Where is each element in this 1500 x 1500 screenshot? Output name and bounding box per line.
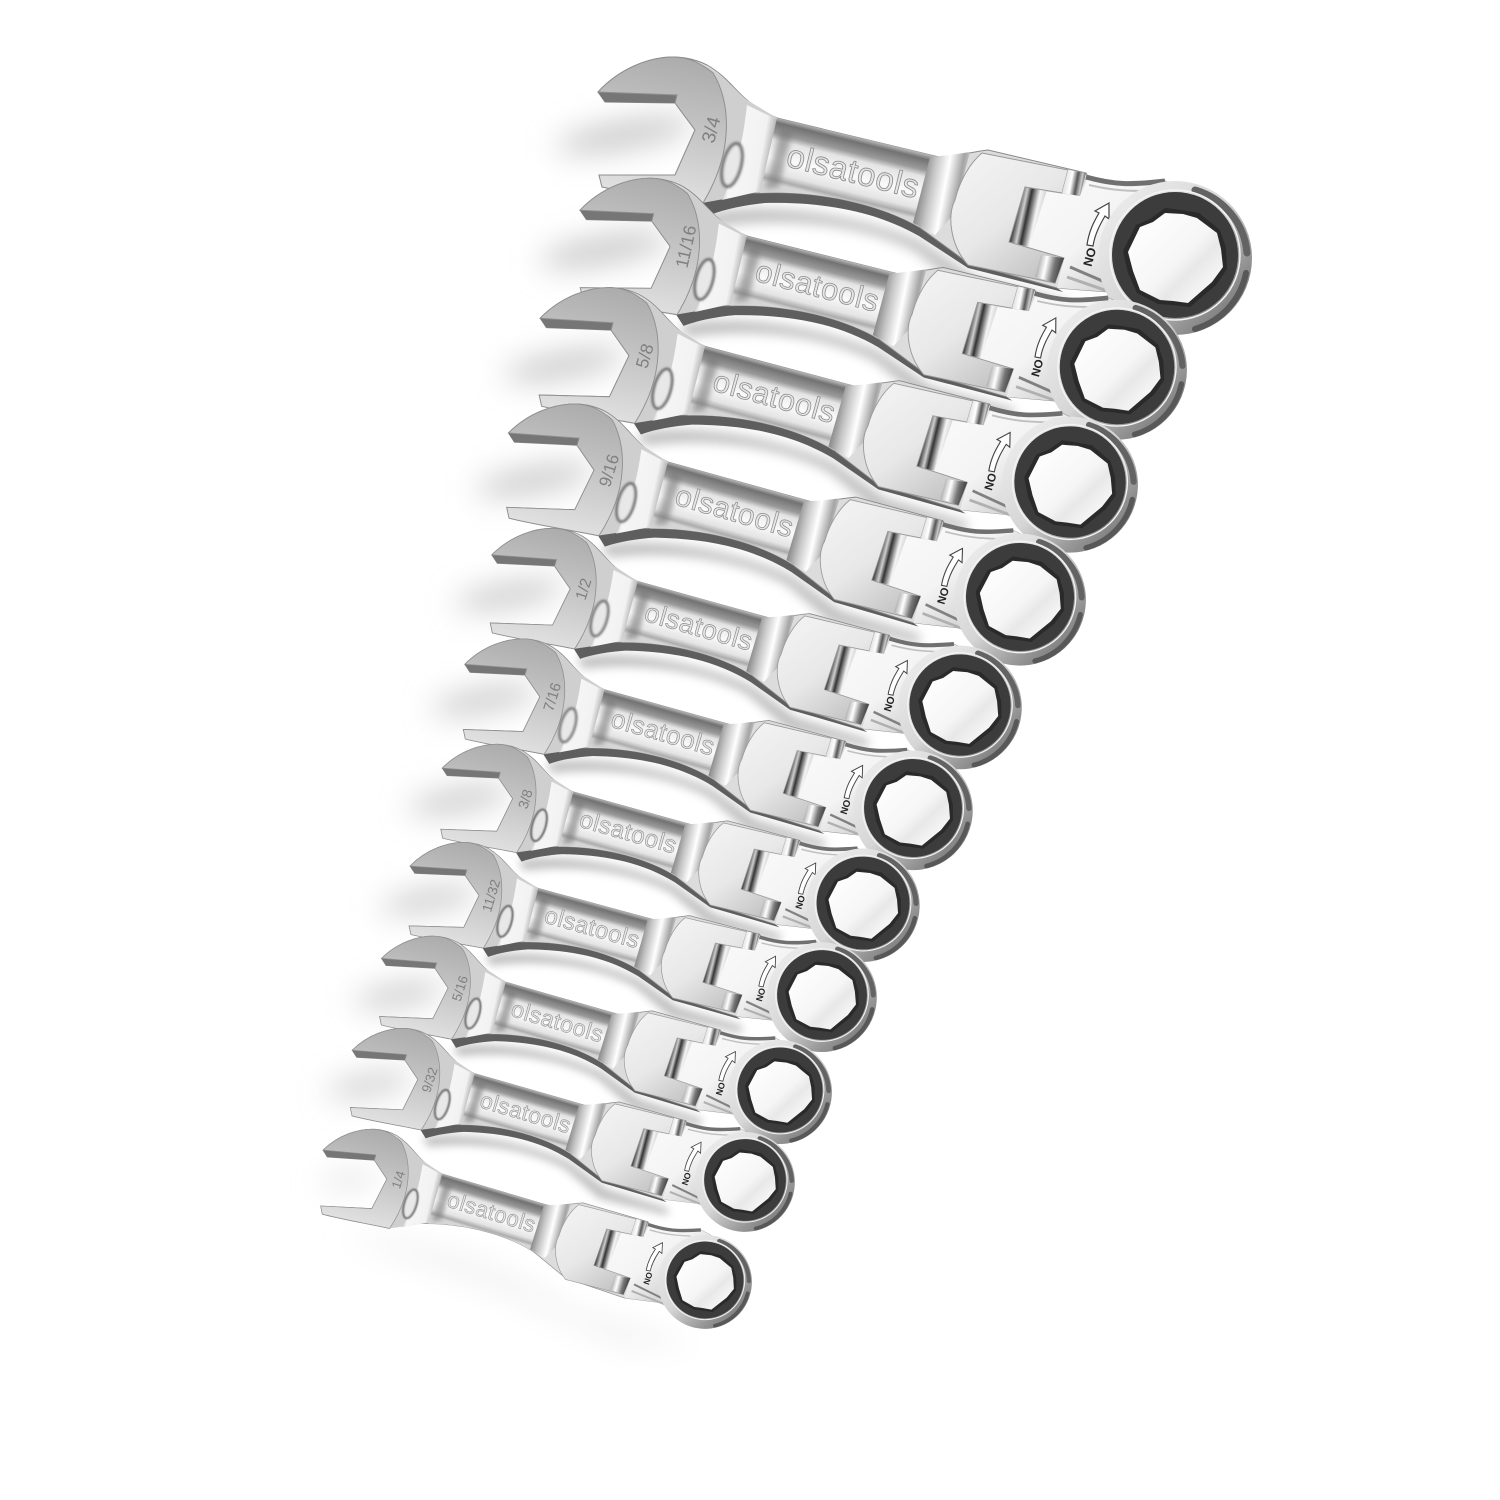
wrench: 1/2	[485, 526, 1028, 771]
ring end	[656, 1232, 754, 1331]
direction label: NO	[936, 586, 952, 606]
wrench body	[406, 841, 840, 1026]
direction label: NO	[839, 798, 854, 816]
ring end	[1046, 299, 1188, 440]
brand logo: olsatools	[783, 137, 923, 205]
ring end	[851, 748, 975, 872]
size marking: 5/16	[449, 974, 471, 1003]
size marking: 1/2	[573, 576, 595, 602]
wrench body	[346, 1026, 765, 1210]
wrench body	[486, 526, 982, 740]
direction label: NO	[714, 1081, 727, 1097]
brand logo: olsatools	[508, 996, 606, 1047]
brand logo: olsatools	[541, 902, 642, 954]
ring end	[1098, 181, 1252, 335]
underside shading	[675, 305, 1015, 418]
size marking: 11/16	[672, 223, 701, 270]
direction label: NO	[641, 1270, 655, 1286]
size marking: 7/16	[541, 681, 565, 713]
ring end	[804, 847, 922, 964]
brand logo: olsatools	[752, 253, 883, 319]
ring end	[1000, 415, 1140, 554]
direction label: NO	[1081, 246, 1099, 268]
underside shading	[702, 193, 1065, 311]
size marking: 3/4	[698, 114, 726, 145]
underside shading	[513, 845, 784, 941]
wrench: 11/32	[405, 841, 881, 1054]
wrench: 9/32	[345, 1026, 801, 1234]
direction label: NO	[883, 695, 898, 713]
wrench: 9/16	[501, 402, 1092, 668]
brand logo: olsatools	[641, 597, 756, 657]
wrench: 3/8	[436, 742, 925, 964]
size marking: 1/4	[388, 1169, 408, 1190]
wrench: 1/4	[315, 1127, 759, 1331]
underside shading	[448, 1032, 705, 1126]
brand logo: olsatools	[709, 364, 839, 430]
ring end	[726, 1038, 834, 1146]
size marking: 9/32	[419, 1065, 441, 1094]
soft shadows behind the wrenches	[319, 110, 700, 1345]
ring end	[766, 941, 878, 1054]
wrench body	[598, 57, 1195, 297]
wrench: 3/4	[598, 57, 1252, 335]
direction label: NO	[794, 894, 807, 910]
underside shading	[480, 941, 744, 1033]
brand logo: olsatools	[477, 1087, 574, 1138]
wrench body	[459, 637, 934, 841]
underside shading	[417, 1123, 671, 1215]
wrench body	[375, 934, 800, 1120]
wrench body	[316, 1127, 725, 1309]
wrench body	[437, 742, 883, 934]
brand logo: olsatools	[444, 1187, 539, 1237]
wrench: 5/16	[374, 934, 838, 1146]
underside shading	[595, 526, 923, 644]
direction label: NO	[1029, 358, 1046, 378]
size marking: 9/16	[595, 452, 623, 489]
ring end	[896, 643, 1024, 771]
wrench: 7/16	[458, 637, 978, 872]
direction label: NO	[754, 987, 768, 1003]
brand logo: olsatools	[608, 705, 718, 761]
wrench body	[535, 286, 1093, 521]
direction label: NO	[680, 1171, 693, 1186]
wrench: 11/16	[578, 178, 1189, 440]
ring end	[693, 1130, 797, 1234]
size marking: 5/8	[632, 341, 658, 370]
wrench: 5/8	[535, 286, 1142, 554]
underside shading	[540, 746, 828, 849]
ring end	[952, 531, 1088, 668]
direction label: NO	[983, 472, 1000, 492]
size marking: 3/8	[515, 787, 536, 811]
wrench body	[502, 402, 1044, 635]
wrench body	[578, 178, 1137, 406]
underside shading	[631, 414, 970, 531]
brand logo: olsatools	[672, 479, 797, 544]
brand logo: olsatools	[576, 806, 680, 860]
underside shading	[571, 640, 872, 748]
size marking: 11/32	[479, 878, 503, 914]
